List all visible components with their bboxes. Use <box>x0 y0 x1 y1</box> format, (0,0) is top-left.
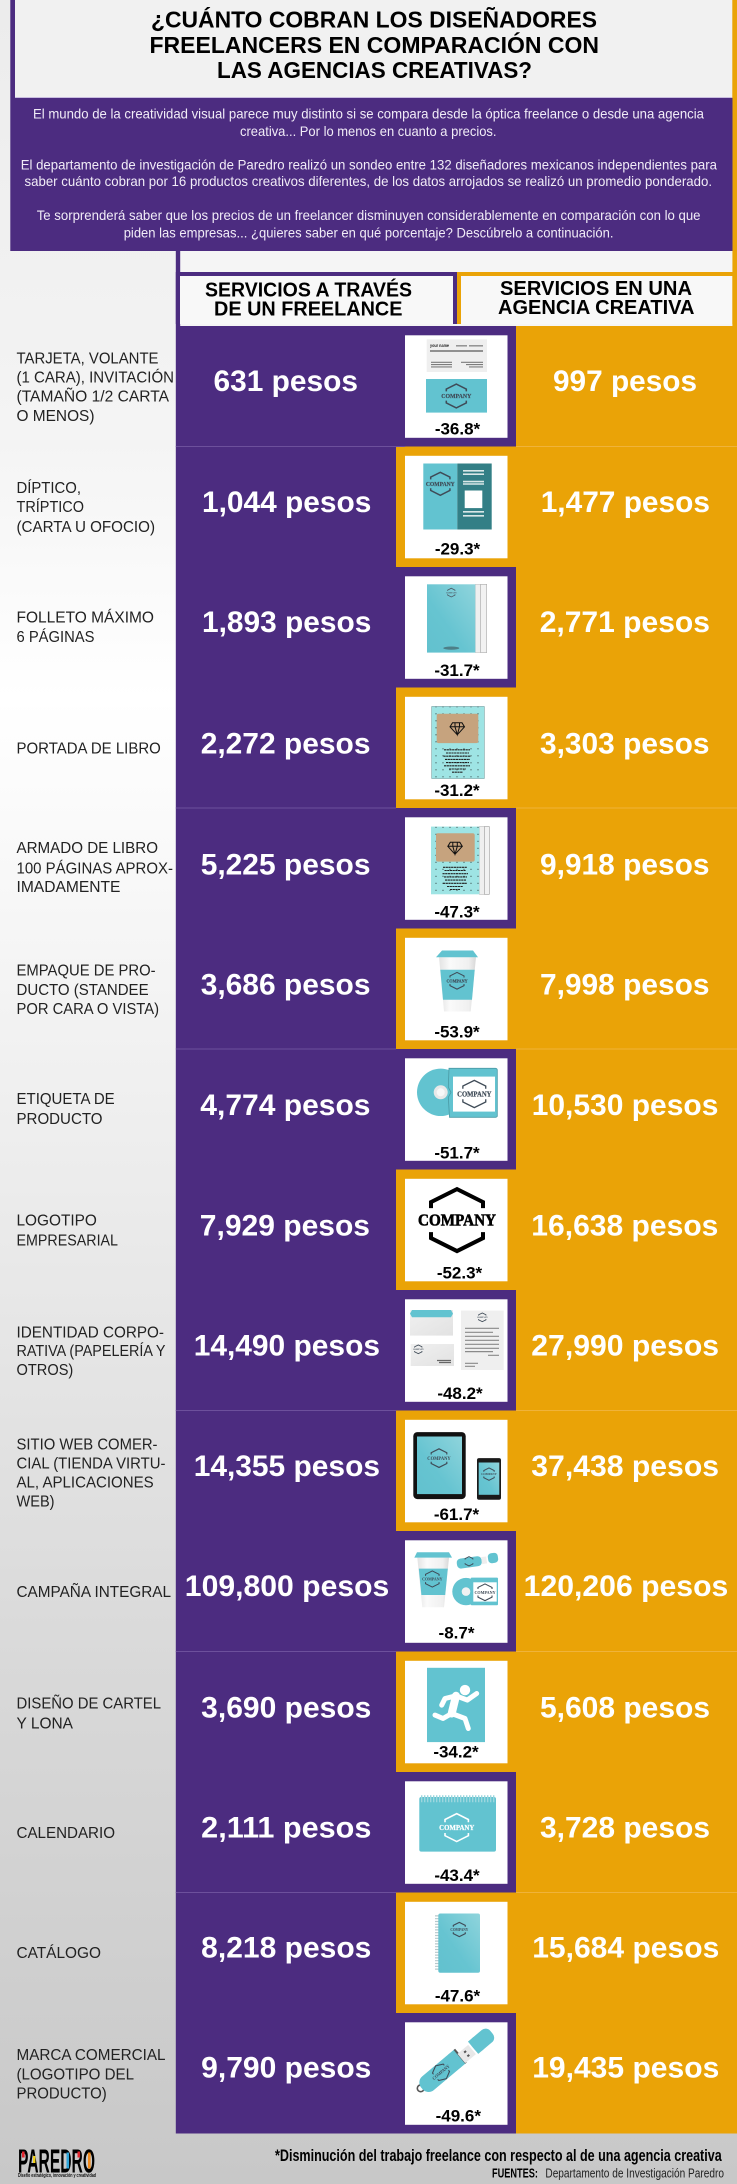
freelance price: 3,686 pesos <box>201 968 370 1001</box>
icon: tablet and phone: COMPANY <box>427 1456 451 1462</box>
label: WEB) <box>16 1493 54 1510</box>
intro text: saber cuánto cobran por 16 productos creativos diferentes, de los datos arrojados se realizó un promedio ponderado. <box>24 174 712 189</box>
intro text: El departamento de investigación de Paredro realizó un sondeo entre 132 diseñadores mexicanos independientes para <box>21 158 717 173</box>
intro text <box>21 107 717 240</box>
agency price: 9,918 pesos <box>540 848 710 881</box>
logo: Paredro <box>18 2144 96 2180</box>
label: CALENDARIO <box>16 1825 115 1842</box>
icon: company logo <box>405 1179 508 1282</box>
icon: business card <box>405 335 508 438</box>
icon: tablet and phone: COMPANY <box>481 1472 497 1476</box>
label <box>16 1213 118 1249</box>
icon: brochure <box>405 576 508 680</box>
percentage: -52.3* <box>437 1263 483 1282</box>
label: 6 PÁGINAS <box>16 629 94 646</box>
label <box>16 2047 166 2102</box>
title: ¿CUÁNTO COBRAN LOS DISEÑADORES <box>151 6 597 32</box>
icon: usb drive: COMPANY <box>431 2063 451 2081</box>
title: FREELANCERS EN COMPARACIÓN CON <box>150 31 599 58</box>
label <box>16 840 173 896</box>
label <box>16 1695 161 1732</box>
percentage: -29.3* <box>435 539 481 558</box>
percentage: -53.9* <box>434 1022 480 1041</box>
label: 100 PÁGINAS APROX- <box>16 860 173 877</box>
label: CAMPAÑA INTEGRAL <box>16 1584 171 1601</box>
label: SITIO WEB COMER- <box>16 1436 158 1453</box>
header area backdrop <box>180 251 732 326</box>
icon: triptych <box>405 456 508 558</box>
title <box>150 6 599 83</box>
icon: brochure: COMPANY <box>446 591 457 594</box>
row 6: empaque <box>16 928 737 1049</box>
icon: book cover <box>405 697 508 800</box>
label <box>16 610 154 646</box>
agency price: 10,530 pesos <box>532 1089 718 1122</box>
percentage: -36.8* <box>435 419 481 438</box>
label: DUCTO (STANDEE <box>16 982 149 999</box>
agency price: 16,638 pesos <box>531 1210 718 1243</box>
label <box>16 350 174 425</box>
label <box>16 1324 166 1379</box>
column header: agencia <box>457 272 737 324</box>
percentage: -51.7* <box>434 1143 480 1162</box>
freelance price: 1,044 pesos <box>202 486 371 519</box>
percentage: -31.2* <box>434 781 480 800</box>
row 11: campana <box>16 1531 737 1652</box>
agency price: 27,990 pesos <box>531 1330 719 1363</box>
icon: cup <box>405 938 508 1041</box>
label <box>16 480 155 536</box>
icon: tablet and phone <box>405 1420 508 1524</box>
intro text: Te sorprenderá saber que los precios de un freelancer disminuyen considerablemente en comparación con lo que <box>37 208 700 223</box>
agency price: 3,303 pesos <box>540 727 710 760</box>
freelance price: 5,225 pesos <box>201 848 370 881</box>
label: (1 CARA), INVITACIÓN <box>16 370 174 387</box>
freelance price: 14,490 pesos <box>194 1330 380 1363</box>
sources: FUENTES: <box>492 2166 538 2180</box>
label <box>16 962 159 1018</box>
row 3: folleto <box>16 567 737 688</box>
agency price: 7,998 pesos <box>540 968 710 1001</box>
icon: stationery: COMPANY <box>477 1316 488 1319</box>
freelance price: 109,800 pesos <box>185 1570 389 1603</box>
column header: agencia: SERVICIOS EN UNA <box>500 277 692 300</box>
icon: business card: COMPANY <box>441 393 472 400</box>
label: CIAL (TIENDA VIRTU- <box>16 1455 166 1472</box>
icon: stationery: COMPANY <box>413 1348 424 1351</box>
column header: freelance <box>176 251 457 326</box>
label: DISEÑO DE CARTEL <box>16 1695 161 1712</box>
percentage: -43.4* <box>434 1866 480 1885</box>
icon: triptych: COMPANY <box>426 481 455 488</box>
icon: catalog notebook: COMPANY <box>450 1928 468 1932</box>
label: (LOGOTIPO DEL <box>16 2066 134 2083</box>
percentage: -49.6* <box>436 2107 481 2126</box>
icon: calendar <box>405 1781 508 1885</box>
icon: calendar: COMPANY <box>439 1823 475 1832</box>
label: Y LONA <box>16 1715 74 1732</box>
row separators <box>176 446 737 1892</box>
agency price: 5,608 pesos <box>540 1692 710 1725</box>
label: FOLLETO MÁXIMO <box>16 610 154 627</box>
freelance price: 4,774 pesos <box>200 1089 370 1122</box>
icon: campaign set <box>405 1540 508 1643</box>
row 15: marca <box>16 2013 737 2134</box>
freelance price: 9,790 pesos <box>201 2052 371 2085</box>
agency price: 1,477 pesos <box>541 486 710 519</box>
row 5: armado <box>16 808 737 928</box>
label: EMPRESARIAL <box>16 1232 118 1249</box>
freelance price: 2,272 pesos <box>201 727 370 760</box>
label: (CARTA U OFOCIO) <box>16 519 155 536</box>
label: DÍPTICO, <box>16 480 81 497</box>
row 2: diptico <box>16 446 737 567</box>
icon: book <box>405 817 508 921</box>
column header: agencia: AGENCIA CREATIVA <box>498 296 695 319</box>
freelance price: 631 pesos <box>214 365 358 398</box>
row 12: cartel <box>16 1652 737 1772</box>
freelance price: 8,218 pesos <box>201 1932 371 1965</box>
label: CATÁLOGO <box>16 1945 101 1962</box>
right gold strip <box>732 0 737 326</box>
column header: freelance: SERVICIOS A TRAVÉS <box>205 279 412 302</box>
row 14: catalogo <box>16 1892 737 2013</box>
label: PORTADA DE LIBRO <box>16 740 161 757</box>
row 4: portada <box>16 688 737 808</box>
icon: campaign set: COMPANY <box>422 1576 443 1581</box>
percentage: -31.7* <box>434 661 480 680</box>
label <box>16 1436 166 1510</box>
agency price: 15,684 pesos <box>532 1932 719 1965</box>
icon: company logo: COMPANY <box>418 1211 496 1230</box>
agency price: 3,728 pesos <box>540 1812 710 1845</box>
row 13: calendario <box>16 1772 737 1892</box>
percentage: -34.2* <box>433 1743 479 1762</box>
label: EMPAQUE DE PRO- <box>16 962 156 979</box>
freelance price: 2,111 pesos <box>201 1812 371 1845</box>
agency price: 120,206 pesos <box>524 1570 728 1603</box>
icon: stationery <box>405 1299 508 1403</box>
label: OTROS) <box>16 1362 73 1379</box>
agency price: 37,438 pesos <box>531 1450 719 1483</box>
freelance price: 7,929 pesos <box>200 1210 370 1243</box>
freelance price: 14,355 pesos <box>194 1450 380 1483</box>
icon: CD sleeve: COMPANY <box>457 1089 492 1098</box>
intro panel <box>10 98 733 251</box>
icon: usb drive <box>405 2022 508 2126</box>
label: TARJETA, VOLANTE <box>16 350 158 367</box>
label: MARCA COMERCIAL <box>16 2047 166 2064</box>
icon: cup: COMPANY <box>446 978 468 983</box>
agency price: 19,435 pesos <box>532 2052 719 2085</box>
percentage: -47.3* <box>434 902 480 921</box>
text: PAREDRO <box>18 2144 95 2180</box>
column header: freelance: DE UN FREELANCE <box>214 298 402 321</box>
label: PRODUCTO <box>16 1111 102 1128</box>
intro text: piden las empresas... ¿quieres saber en qué porcentaje? Descúbrelo a continuación. <box>124 225 613 240</box>
label: RATIVA (PAPELERÍA Y <box>16 1343 166 1360</box>
agency price: 2,771 pesos <box>540 606 710 639</box>
label <box>16 1091 115 1128</box>
row 7: etiqueta <box>16 1049 737 1170</box>
percentage: -61.7* <box>434 1505 480 1524</box>
title: LAS AGENCIAS CREATIVAS? <box>217 57 532 83</box>
percentage: -47.6* <box>435 1986 481 2005</box>
freelance price: 1,893 pesos <box>202 606 371 639</box>
label: LOGOTIPO <box>16 1213 97 1230</box>
title panel <box>10 0 733 98</box>
row 1: tarjeta <box>16 326 737 446</box>
label: IDENTIDAD CORPO- <box>16 1324 164 1341</box>
percentage: -48.2* <box>437 1384 483 1403</box>
icon: CD sleeve <box>405 1058 508 1162</box>
icon: business card: your name <box>430 343 449 348</box>
icon: runner poster <box>405 1661 508 1763</box>
label: AL, APLICACIONES <box>16 1474 154 1491</box>
label: POR CARA O VISTA) <box>16 1001 159 1018</box>
freelance price: 3,690 pesos <box>201 1692 371 1725</box>
row 9: identidad <box>16 1290 737 1410</box>
label: TRÍPTICO <box>16 499 84 516</box>
label: (TAMAÑO 1/2 CARTA <box>16 389 170 406</box>
intro text: creativa... Por lo menos en cuanto a precios. <box>240 124 496 139</box>
label: ETIQUETA DE <box>16 1091 115 1108</box>
logo: Paredro: Diseño estratégico, innovación y creatividad <box>18 2173 96 2179</box>
label: ARMADO DE LIBRO <box>16 840 158 857</box>
row 8: logotipo <box>16 1170 737 1290</box>
percentage: -8.7* <box>439 1623 475 1642</box>
agency price: 997 pesos <box>553 365 697 398</box>
intro text: El mundo de la creatividad visual parece muy distinto si se compara desde la óptica freelance o desde una agencia <box>33 107 704 122</box>
icon: catalog notebook <box>405 1902 508 2005</box>
label: PRODUCTO) <box>16 2085 107 2102</box>
icon: campaign set: COMPANY <box>474 1590 496 1595</box>
row 10: sitio web <box>16 1410 737 1531</box>
label: IMADAMENTE <box>16 879 120 896</box>
label: O MENOS) <box>16 408 94 425</box>
